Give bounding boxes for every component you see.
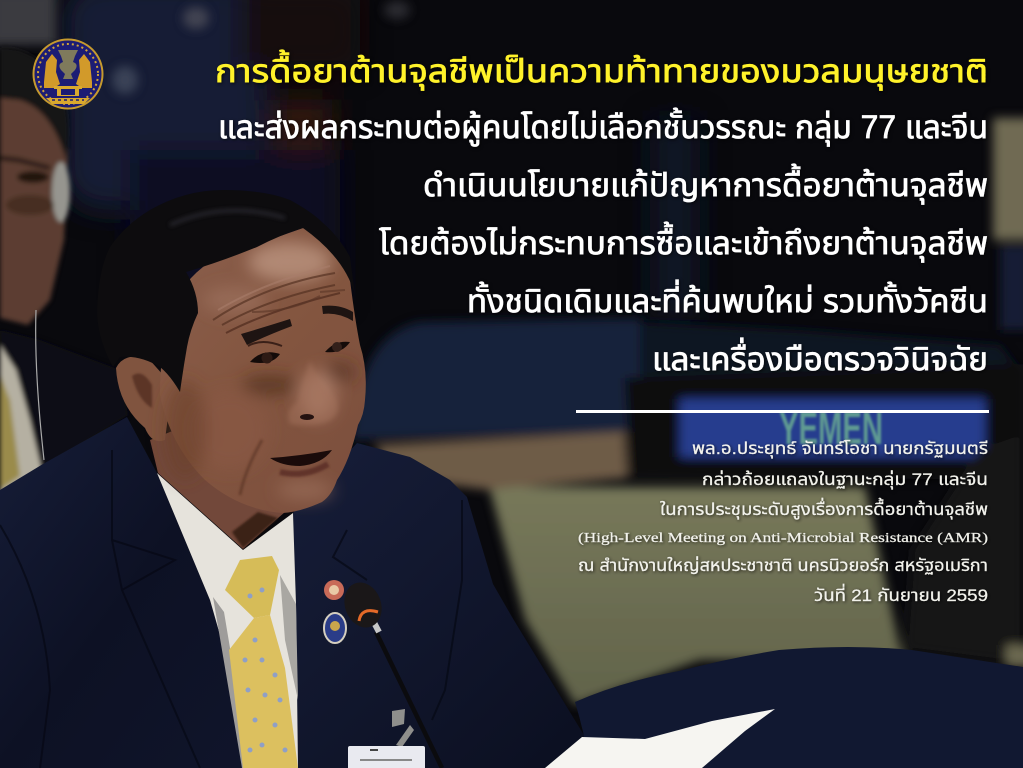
headline text block: และเครื่องมือตรวจวินิจฉัย <box>652 337 988 377</box>
headline text block <box>215 49 988 377</box>
paper <box>545 709 775 768</box>
shirt <box>157 473 298 768</box>
table <box>54 86 82 96</box>
lions <box>44 54 92 88</box>
lapel pins <box>324 580 346 643</box>
tie <box>225 556 298 768</box>
main speaker <box>0 190 590 768</box>
suit left side <box>0 417 258 768</box>
hair <box>97 190 355 392</box>
attribution text block: ณ สำนักงานใหญ่สหประชาชาติ นครนิวยอร์ก สหรัฐอเมริกา <box>578 556 988 575</box>
attribution text block: วันที่ 21 กันยายน 2559 <box>814 583 988 605</box>
rule <box>576 410 989 413</box>
eyebrows <box>241 319 292 345</box>
microphone <box>338 577 442 768</box>
attribution text block: พล.อ.ประยุทธ์ จันทร์โอชา นายกรัฐมนตรี <box>692 439 988 459</box>
headline text block: การดื้อยาต้านจุลชีพเป็นความท้าทายของมวลมนุษยชาติ <box>215 49 988 90</box>
attribution text block: ในการประชุมระดับสูงเรื่องการดื้อยาต้านจุลชีพ <box>660 497 988 521</box>
suit lapels and folds <box>0 450 462 768</box>
forehead wrinkles <box>213 266 345 333</box>
neck <box>150 420 300 549</box>
badge clip <box>392 709 414 747</box>
headline text block: ทั้งชนิดเดิมและที่ค้นพบใหม่ รวมทั้งวัคซีน <box>467 279 988 319</box>
person in the background at left <box>0 48 128 495</box>
headline text block: โดยต้องไม่กระทบการซื้อและเข้าถึงยาต้านจุลชีพ <box>379 221 988 262</box>
urn <box>58 50 78 79</box>
ear <box>116 356 172 441</box>
logo: seal <box>32 38 104 110</box>
attribution text block: (High-Level Meeting on Anti-Microbial Resistance (AMR) <box>578 531 988 546</box>
face <box>160 228 366 513</box>
name badge <box>348 746 425 768</box>
eyes <box>248 342 350 364</box>
face shading and highlights <box>163 242 356 500</box>
headline text block: ดำเนินนโยบายแก้ปัญหาการดื้อยาต้านจุลชีพ <box>423 163 988 204</box>
headline text block: และส่งผลกระทบต่อผู้คนโดยไม่เลือกชั้นวรรณะ กลุ่ม 77 และจีน <box>218 107 988 147</box>
mouth <box>270 450 332 466</box>
attribution text block: กล่าวถ้อยแถลงในฐานะกลุ่ม 77 และจีน <box>702 469 988 490</box>
YEMEN sign lettering: YEMEN <box>779 402 883 454</box>
suit right side <box>258 443 590 768</box>
blue chair foreground <box>575 647 1023 768</box>
base band <box>46 98 90 104</box>
nose <box>288 360 338 425</box>
attribution text block <box>578 439 988 605</box>
